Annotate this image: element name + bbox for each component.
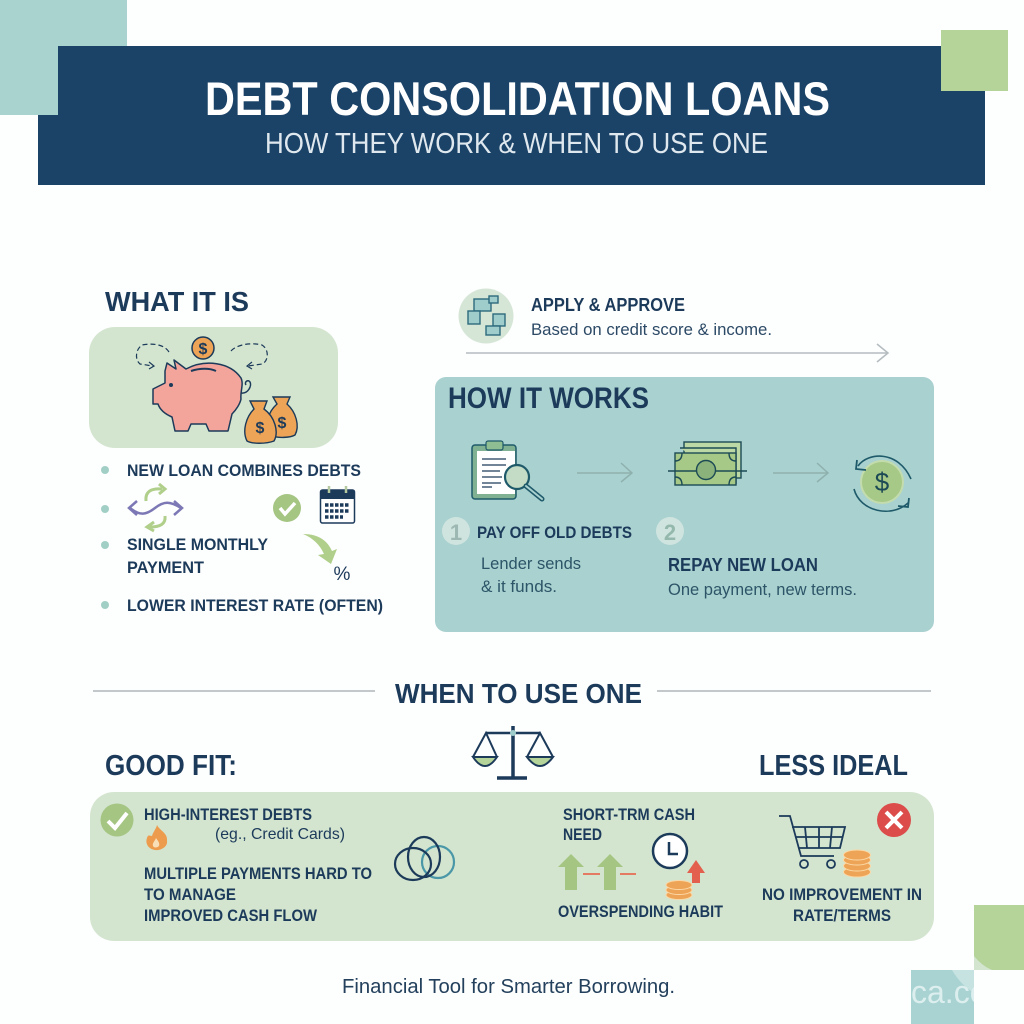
corner accent: top-left teal: [0, 0, 127, 115]
less ideal: no improvement: RATE/TERMS: [793, 907, 891, 925]
bullet text: single monthly payment: SINGLE MONTHLY: [127, 535, 269, 554]
good fit: high-interest debts: HIGH-INTEREST DEBTS: [144, 806, 312, 824]
icon: green check: [273, 494, 301, 522]
step 1 description: Lender sends: [481, 554, 581, 573]
section heading: when to use one: WHEN TO USE ONE: [395, 678, 642, 709]
icon: coin: $: [199, 341, 208, 358]
icon: money bags: $: [278, 415, 287, 432]
step 2 description: One payment, new terms.: [668, 580, 857, 599]
less ideal: short-term cash need: NEED: [563, 826, 602, 844]
icon: flowchart: [458, 288, 514, 344]
footer tagline: Financial Tool for Smarter Borrowing.: [342, 976, 675, 998]
corner accent: bottom-right green: [974, 905, 1024, 970]
less ideal: overspending: OVERSPENDING HABIT: [558, 903, 723, 921]
less ideal: no improvement: NO IMPROVEMENT IN: [762, 886, 922, 904]
step 2 badge: [656, 517, 684, 545]
corner accent: bottom teal with watermark: ca.co: [911, 974, 987, 1010]
icon: exchange arrows: [129, 484, 182, 531]
icon: banknotes: [668, 442, 747, 485]
heading: how it works: HOW IT WORKS: [448, 382, 649, 415]
step 1 description: & it funds.: [481, 577, 557, 596]
header banner: [38, 46, 985, 185]
icon: piggy bank: [153, 360, 251, 431]
arrow: cash to repay: [773, 463, 828, 482]
icon: shopping cart: [779, 816, 845, 868]
heading: less ideal: LESS IDEAL: [759, 750, 908, 782]
step 1 badge: [442, 517, 470, 545]
panel: when to use: [90, 792, 934, 941]
corner accent: top-right green: [941, 30, 1008, 91]
step 2 heading: REPAY NEW LOAN: [668, 555, 818, 575]
icon: dashed arrows: [136, 344, 267, 369]
icon: red cross badge: [877, 803, 911, 837]
icon: coin stack small: [666, 880, 692, 900]
icon: red up arrow: [687, 860, 705, 883]
good fit: example: (eg., Credit Cards): [215, 826, 345, 843]
bullet text: new loan: NEW LOAN COMBINES DEBTS: [127, 461, 361, 480]
step description: Based on credit score & income.: [531, 320, 772, 339]
step 1 badge: 1: [450, 520, 462, 545]
corner accent: bottom teal with watermark: [911, 970, 987, 1024]
arrow: apply to how it works: [466, 344, 888, 362]
heading: what it is: WHAT IT IS: [105, 286, 249, 317]
icon: coin stack: [844, 850, 870, 877]
icon: check badge: [100, 804, 134, 836]
good fit: multiple payments: MULTIPLE PAYMENTS HARD TO: [144, 865, 372, 883]
icon: circular dollar: [854, 456, 911, 511]
step heading: APPLY & APPROVE: [531, 295, 685, 315]
icon: coin: [192, 337, 214, 359]
step 2 badge: 2: [664, 520, 676, 545]
subtitle: HOW THEY WORK & WHEN TO USE ONE: [265, 128, 768, 160]
step: apply and approve: [458, 288, 772, 344]
step 1 heading: PAY OFF OLD DEBTS: [477, 523, 632, 542]
bullet text: single monthly payment: PAYMENT: [127, 558, 205, 577]
good fit: multiple payments: IMPROVED CASH FLOW: [144, 907, 317, 925]
bullet text: lower interest rate: LOWER INTEREST RATE (OFTEN): [127, 596, 383, 615]
heading: good fit: GOOD FIT:: [105, 750, 237, 782]
icon: calendar: [320, 486, 354, 523]
title: DEBT CONSOLIDATION LOANS: [205, 72, 830, 125]
icon: balance scale: [473, 726, 553, 778]
arrow: step 1 to cash: [577, 463, 632, 482]
panel: piggy bank illustration: [89, 327, 338, 448]
icon: circular dollar: $: [875, 467, 890, 497]
less ideal: short-term cash need: SHORT-TRM CASH: [563, 806, 695, 824]
icon: clipboard with magnifier: [472, 441, 542, 499]
icon: overlapping rings: [395, 837, 454, 880]
icon: down arrow with percent: [303, 534, 351, 585]
icon: down arrow with percent: %: [334, 564, 351, 585]
icon: money bags: [245, 397, 297, 443]
good fit: multiple payments: TO MANAGE: [144, 886, 236, 904]
bullet list: what it is: [101, 461, 383, 615]
icon: clock: [653, 834, 687, 868]
icon: flame: [146, 825, 167, 850]
icon: money bags: $: [256, 420, 265, 437]
panel: how it works: [435, 377, 934, 632]
icon: up arrows: [558, 854, 636, 890]
